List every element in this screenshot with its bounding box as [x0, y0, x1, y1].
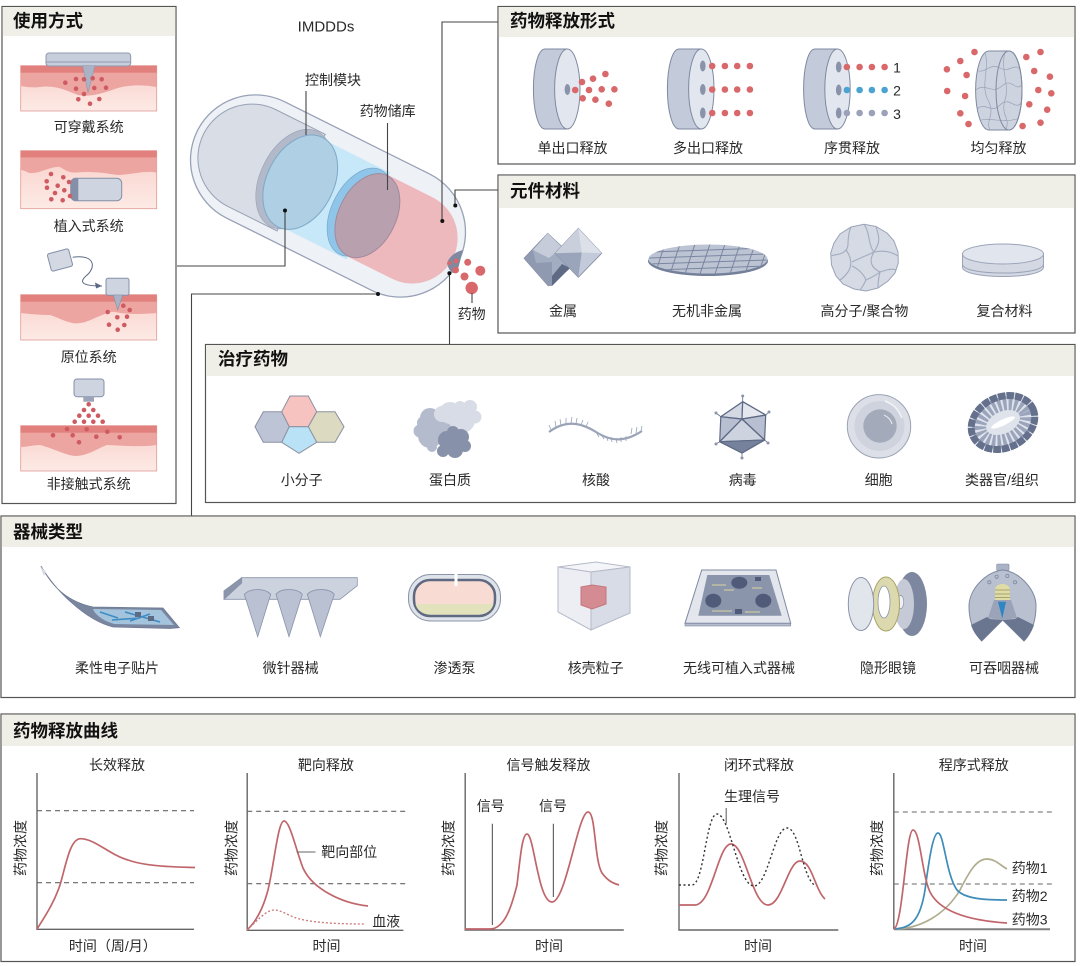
heading: usage modes: 使用方式: [13, 11, 83, 31]
label: in situ: 原位系统: [61, 349, 117, 365]
chart: long-acting release: [13, 757, 195, 954]
icon: sequential release: 2: [893, 82, 901, 98]
label: IMDDDs: IMDDDs: [298, 18, 354, 36]
heading: materials: 元件材料: [510, 181, 580, 201]
connector: therapeutics panel to outlet: [448, 273, 450, 344]
label: osmotic pump: 渗透泵: [434, 660, 476, 676]
label: virus: 病毒: [729, 472, 757, 488]
connector: device type panel to capsule: [192, 294, 378, 516]
icon: sequential release: [804, 49, 901, 129]
label: nucleic acid: 核酸: [582, 472, 610, 488]
icon: metal crystals: [524, 228, 602, 286]
heading: release curves: 药物释放曲线: [13, 721, 118, 741]
label: metal: 金属: [549, 303, 577, 319]
icon: sequential release: 1: [893, 60, 901, 76]
label: composite: 复合材料: [976, 303, 1032, 319]
chart: signal-triggered release: 信号: [539, 798, 567, 814]
chart: targeted release: 靶向释放: [298, 757, 354, 773]
label: non-contact: 非接触式系统: [47, 476, 131, 492]
label: polymer: 高分子/聚合物: [821, 303, 908, 319]
icon: cell: [847, 395, 911, 458]
label: small molecule: 小分子: [281, 472, 323, 488]
icon: small molecule: [255, 396, 344, 453]
chart: long-acting release: 长效释放: [89, 757, 145, 773]
chart: targeted release: [224, 757, 407, 954]
label: flexible patch: 柔性电子贴片: [75, 660, 159, 676]
label: control module: [305, 72, 361, 135]
label: wearable: 可穿戴系统: [54, 119, 124, 135]
icon: wireless implant: [685, 570, 791, 626]
chart: programmed release: [869, 757, 1053, 954]
chart: closed-loop release: [654, 757, 838, 954]
icon: wearable system: [21, 53, 157, 111]
panel: device types: [1, 516, 1075, 698]
chart: programmed release: 程序式释放: [939, 757, 1009, 773]
panel: drug release curves: [1, 714, 1075, 962]
label: implantable: 植入式系统: [54, 218, 124, 234]
icon: contact lens: [848, 572, 927, 636]
icon: uniform release: [944, 49, 1055, 130]
icon: sequential release: 3: [893, 106, 901, 122]
chart: targeted release: 时间: [312, 938, 340, 954]
label: released drug: 药物: [458, 306, 486, 322]
icon: osmotic pump: [408, 573, 500, 621]
icon: multiple outlets: [667, 49, 753, 129]
icon: single outlet: [533, 49, 618, 129]
icon: protein: [414, 400, 482, 458]
icon: implantable system: [21, 151, 157, 209]
chart: programmed release: 药物浓度: [869, 820, 885, 876]
chart: signal-triggered release: 时间: [535, 938, 563, 954]
connector: materials panel to shell: [455, 190, 498, 206]
label: drug reservoir: [360, 103, 416, 190]
icon: swallowable device: [969, 564, 1036, 641]
label: uniform: 均匀释放: [970, 140, 1026, 156]
label: contact lens: 隐形眼镜: [860, 660, 916, 676]
icon: inorganic wafer: [648, 244, 768, 276]
label: microneedle: 微针器械: [263, 660, 319, 676]
label: swallowable: 可吞咽器械: [969, 660, 1039, 676]
label: multiple outlets: 多出口释放: [673, 140, 743, 156]
icon: composite disc: [962, 244, 1044, 276]
label: wireless implant: 无线可植入式器械: [683, 660, 795, 676]
connector: release form panel to reservoir: [442, 22, 498, 221]
icon: nucleic acid: [549, 417, 642, 443]
chart: signal-triggered release: [440, 757, 624, 954]
label: single outlet: 单出口释放: [538, 140, 608, 156]
chart: closed-loop release: 时间: [744, 938, 772, 954]
icon: core-shell particle: [558, 562, 630, 630]
panel: drug release forms: [498, 6, 1075, 164]
label: released drug: [458, 259, 486, 322]
label: inorganic: 无机非金属: [672, 303, 742, 319]
chart: signal-triggered release: 药物浓度: [440, 820, 456, 876]
chart: signal-triggered release: 信号: [477, 798, 505, 814]
chart: programmed release: 药物3: [1012, 911, 1048, 927]
label: protein: 蛋白质: [429, 472, 471, 488]
connector dots: [283, 204, 457, 296]
label: sequential: 序贯释放: [824, 140, 880, 156]
chart: long-acting release: 药物浓度: [13, 820, 29, 876]
label: control module: 控制模块: [305, 72, 361, 88]
chart: closed-loop release: 药物浓度: [654, 820, 670, 876]
illustration: capsule device: [168, 73, 488, 319]
chart: closed-loop release: 闭环式释放: [724, 757, 794, 773]
label: core-shell: 核壳粒子: [568, 660, 624, 676]
icon: virus: [714, 394, 770, 460]
connector: usage panel to capsule: [177, 210, 285, 266]
chart: programmed release: 药物1: [1012, 860, 1048, 876]
icon: polymer: [831, 224, 898, 291]
panel: component materials: [498, 175, 1075, 333]
chart: long-acting release: 时间（周/月）: [69, 938, 157, 954]
heading: therapeutics: 治疗药物: [218, 349, 288, 369]
panel: therapeutics: [206, 344, 1075, 502]
chart: signal-triggered release: 信号触发释放: [506, 757, 590, 773]
label: cell: 细胞: [865, 472, 893, 488]
icon: microneedles: [224, 578, 357, 637]
label: organoid/tissue: 类器官/组织: [965, 472, 1039, 488]
chart: targeted release: 血液: [372, 914, 400, 930]
panel: usage modes: [2, 6, 176, 504]
heading: release forms: 药物释放形式: [510, 11, 615, 31]
chart: targeted release: 药物浓度: [224, 820, 240, 876]
icon: flexible patch: [40, 566, 179, 628]
chart: programmed release: 药物2: [1012, 888, 1048, 904]
heading: device types: 器械类型: [13, 522, 83, 542]
icon: non-contact system: [21, 379, 157, 471]
icon: in situ system: [21, 248, 157, 340]
icon: organoid: [959, 382, 1047, 463]
chart: targeted release: 靶向部位: [321, 844, 377, 860]
chart: closed-loop release: 生理信号: [724, 789, 780, 805]
label: drug reservoir: 药物储库: [360, 103, 416, 119]
chart: programmed release: 时间: [959, 938, 987, 954]
